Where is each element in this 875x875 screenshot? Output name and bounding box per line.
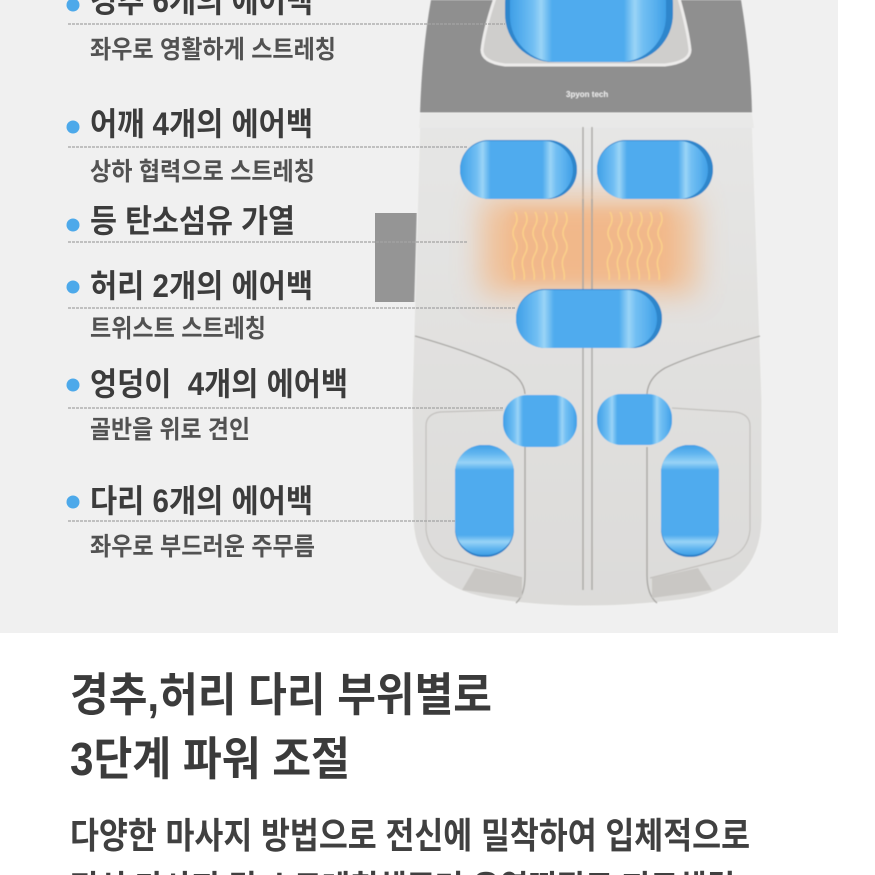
callout: hip: 골반을 위로 견인 [90,416,250,444]
callout: shoulder [66,106,467,186]
seam lines [415,127,760,603]
waist airbag [516,289,662,348]
callout: shoulder: 어깨 4개의 에어백 [90,106,313,142]
leg airbag left [455,445,514,557]
callout: neck: 좌우로 영활하게 스트레칭 [90,36,336,64]
mat light body [412,113,762,606]
product: massage mat [412,0,762,606]
panel: gray background [0,0,838,633]
body text [70,815,750,875]
shoulder highlight [419,114,754,128]
callout: hip [66,366,503,444]
callout: waist [66,268,516,343]
shoulder airbag left [460,140,577,199]
heat zone [482,198,696,294]
body text: 다양한 마사지 방법으로 전신에 밀착하여 입체적으로 [70,815,750,856]
heat waves right [607,212,662,280]
callout: back heat [66,203,467,242]
heading: 3단계 파워 조절 [70,733,350,785]
side tab [375,213,417,302]
shoulder airbag right [597,140,713,199]
heading [70,669,492,785]
callout: neck [66,0,505,64]
callout: leg: 다리 6개의 에어백 [90,483,313,519]
heading: 경추,허리 다리 부위별로 [70,669,492,721]
callout: leg: 좌우로 부드러운 주무름 [90,533,315,561]
hip airbag left [503,395,577,447]
heat waves left [512,212,567,280]
callout: shoulder: 상하 협력으로 스트레칭 [90,158,315,186]
mat gray top section [420,0,752,114]
callout: hip: 엉덩이 4개의 에어백 [90,366,348,402]
callout: waist: 트위스트 스트레칭 [90,315,266,343]
callout: back heat: 등 탄소섬유 가열 [90,203,295,239]
neck airbag [505,0,673,62]
leg airbag right [661,445,719,557]
logo: 3pyon tech [566,90,608,99]
hip airbag right [597,394,672,445]
callout: leg [66,483,455,561]
neck pillow [482,0,690,65]
callout: waist: 허리 2개의 에어백 [90,268,313,304]
